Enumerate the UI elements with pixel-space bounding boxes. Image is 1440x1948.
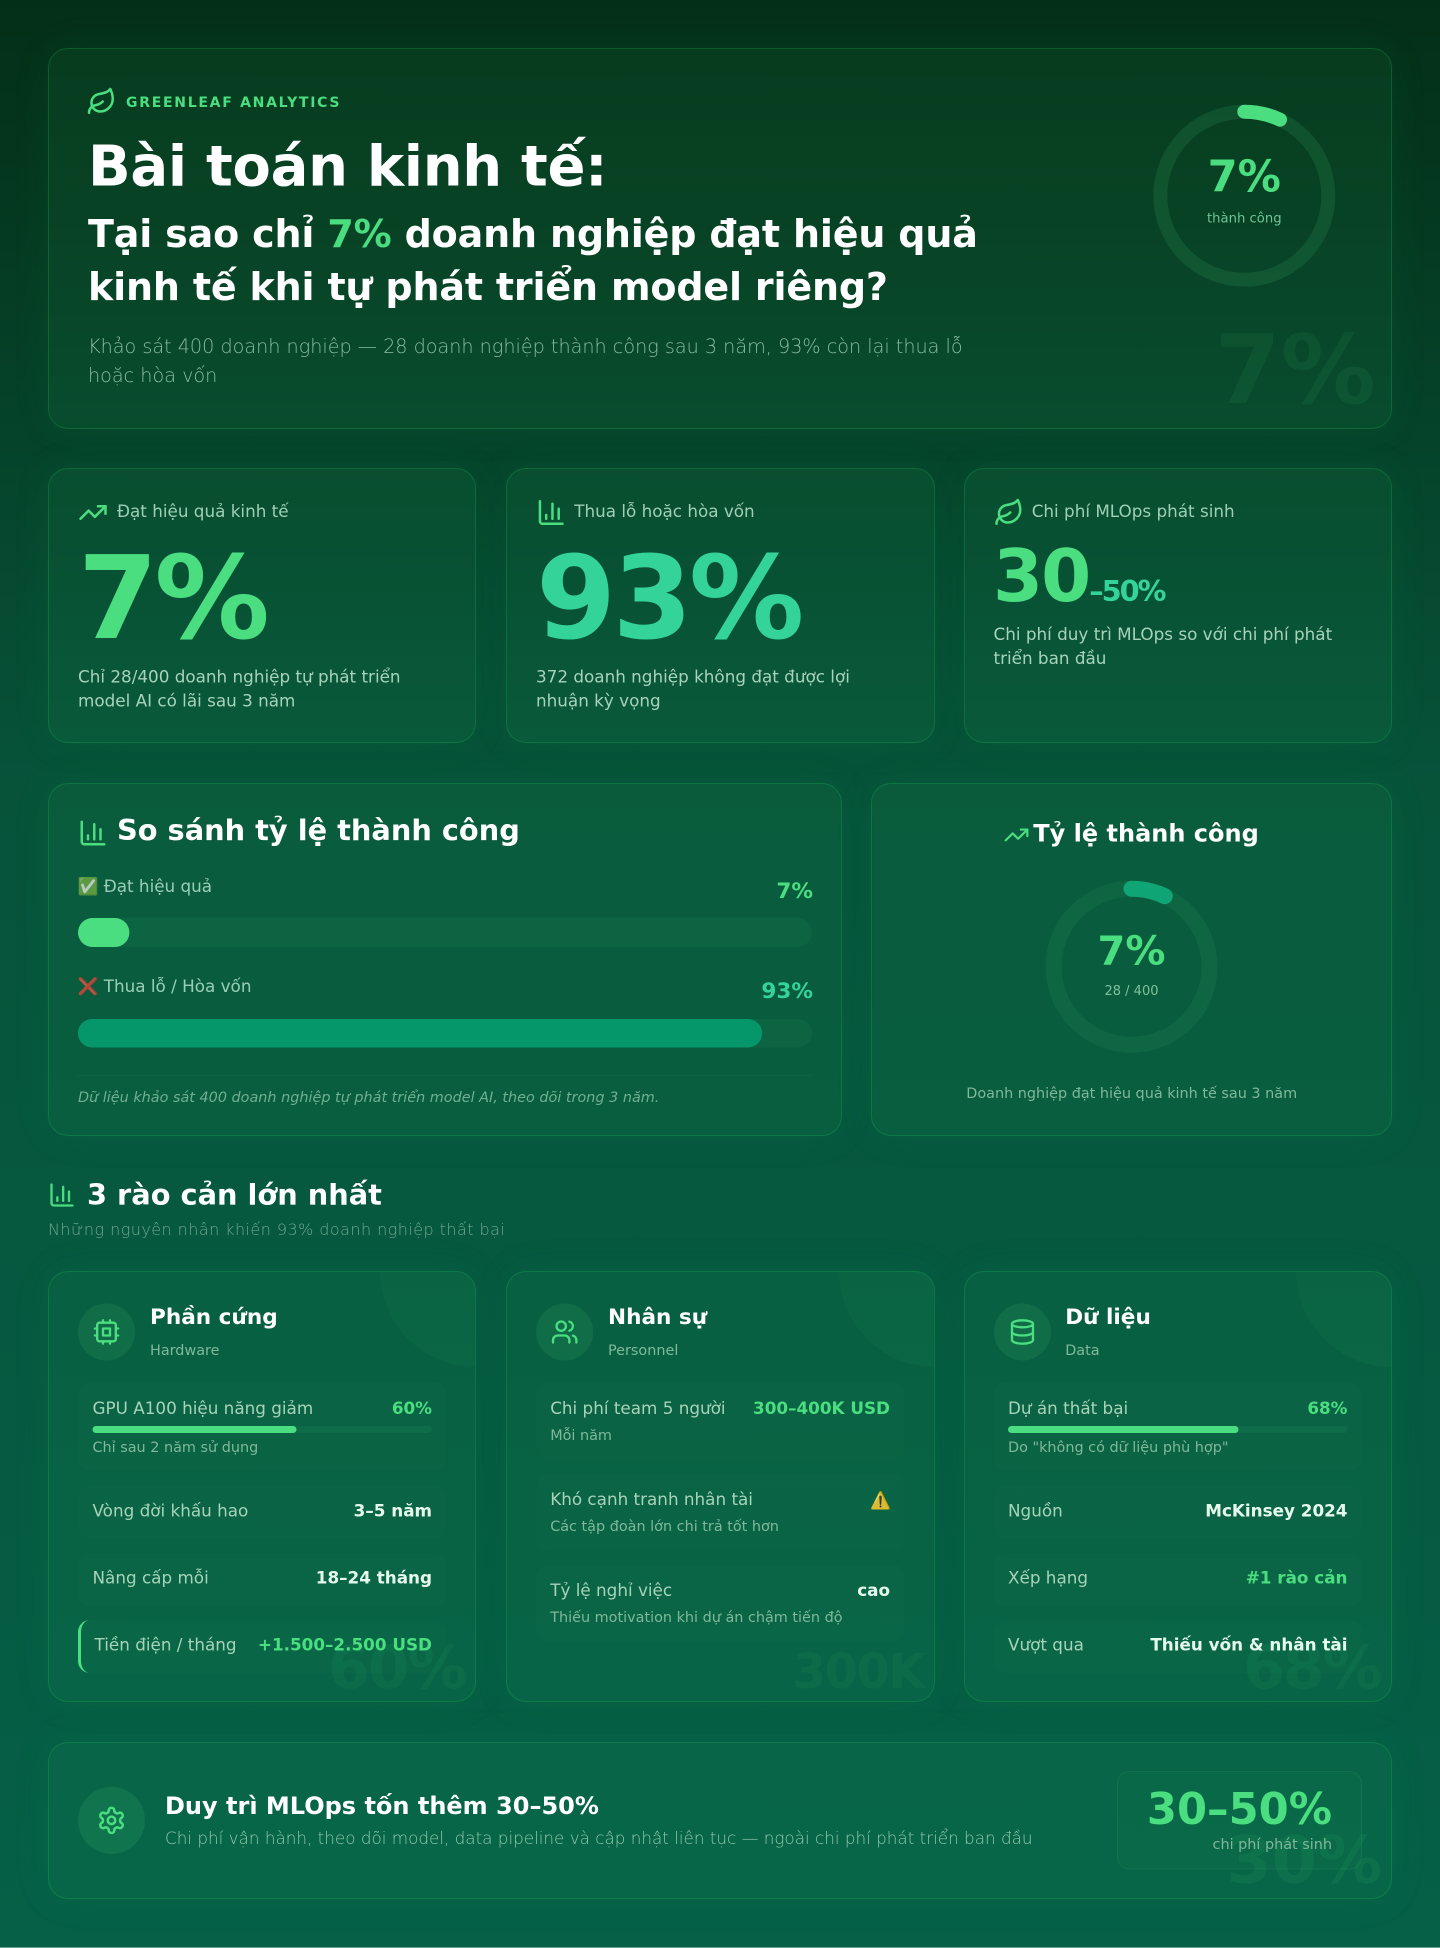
panel: stat 7% [48, 468, 476, 743]
row: electricity: +1.500–2.500 USD [258, 1635, 432, 1655]
panel: stat 93% [506, 468, 934, 743]
subtitle: 7% doanh nghiệp đạt hiệu quả [327, 212, 978, 256]
bar: success [78, 876, 813, 947]
icon: users [536, 1304, 593, 1360]
panel: hero header [48, 48, 1392, 429]
row: lifespan [78, 1486, 446, 1538]
watermark: 300K: 300K [792, 1644, 927, 1700]
subtitle: Tại sao chỉ [88, 212, 327, 256]
row: upgrade: 18–24 tháng [316, 1567, 432, 1587]
bar: success: ✅ Đạt hiệu quả [78, 876, 212, 896]
icon: bar chart [539, 501, 562, 524]
row: overcome: Vượt qua [1008, 1635, 1084, 1655]
card subheading: Hardware [150, 1343, 220, 1359]
bar: failure: 93% [761, 979, 813, 1004]
row: overcome: Thiếu vốn & nhân tài [1150, 1635, 1348, 1655]
row: attrition: Tỷ lệ nghỉ việc [549, 1580, 672, 1600]
stat description: 372 doanh nghiệp không đạt được lợi [536, 667, 849, 687]
row: source: McKinsey 2024 [1205, 1500, 1348, 1520]
section subtitle: Những nguyên nhân khiến 93% doanh nghiệp thất bại [48, 1220, 505, 1239]
card heading: Dữ liệu [1065, 1305, 1151, 1330]
bar: failure: ❌ Thua lỗ / Hòa vốn [78, 976, 251, 997]
row: talent competition: Các tập đoàn lớn chi trả tốt hơn [550, 1518, 778, 1535]
icon: leaf [996, 500, 1020, 524]
row: attrition [536, 1565, 904, 1642]
caption: Doanh nghiệp đạt hiệu quả kinh tế sau 3 năm [966, 1085, 1297, 1102]
watermark: 60%: 60% [328, 1633, 467, 1702]
panel heading: Tỷ lệ thành công [1033, 820, 1259, 848]
panel: MLOps banner [48, 1742, 1392, 1899]
icon: gear [78, 1787, 145, 1854]
row: source: Nguồn [1008, 1500, 1063, 1520]
card subheading: Data [1065, 1343, 1100, 1359]
row: GPU: 60% [392, 1398, 432, 1418]
row: failed projects: Do "không có dữ liệu phù hợp" [1008, 1440, 1228, 1456]
card subheading: Personnel [608, 1343, 678, 1359]
footnote: Dữ liệu khảo sát 400 doanh nghiệp tự phát triển model AI, theo dõi trong 3 năm. [78, 1089, 659, 1106]
stat value: 30–50% [993, 534, 1166, 618]
watermark: 7%: 7% [1214, 316, 1376, 426]
watermark: 68%: 68% [1243, 1633, 1382, 1702]
row: lifespan: Vòng đời khấu hao [92, 1500, 248, 1520]
row: source [994, 1486, 1362, 1538]
row: rank: Xếp hạng [1008, 1567, 1088, 1587]
donut: 7% success: thành công [1207, 211, 1282, 227]
card heading: Nhân sự [608, 1305, 707, 1330]
row: rank [994, 1553, 1362, 1606]
row: rank: #1 rào cản [1246, 1567, 1348, 1587]
callout: 30-50% [1118, 1772, 1362, 1869]
row: attrition: cao [857, 1580, 890, 1600]
row: electricity [78, 1620, 446, 1673]
row: lifespan: 3–5 năm [354, 1500, 432, 1520]
icon: bar chart [52, 1185, 73, 1206]
row: talent competition: ⚠️ [870, 1490, 890, 1510]
stat value: 7% [78, 532, 267, 666]
stat label: Chi phí MLOps phát sinh [1032, 501, 1235, 521]
section title: 3 rào cản lớn nhất [87, 1177, 382, 1211]
donut: 28 of 400: 7% [1098, 928, 1165, 974]
stat description: Chi phí duy trì MLOps so với chi phí phát [994, 624, 1333, 644]
row: GPU: Chỉ sau 2 năm sử dụng [92, 1440, 258, 1456]
panel: data [964, 1271, 1392, 1702]
row: failed projects [994, 1382, 1362, 1470]
stat description: Chỉ 28/400 doanh nghiệp tự phát triển [78, 667, 401, 687]
panel: hardware [48, 1271, 476, 1702]
donut: 7% success [1160, 112, 1328, 280]
description: hoặc hòa vốn [88, 364, 217, 387]
row: GPU [78, 1382, 446, 1470]
row: upgrade: Nâng cấp mỗi [92, 1567, 209, 1587]
banner title: Duy trì MLOps tốn thêm 30–50% [165, 1792, 599, 1820]
panel: success donut [871, 783, 1392, 1136]
row: electricity: Tiền điện / tháng [94, 1635, 237, 1655]
donut: 28 of 400: 28 / 400 [1104, 984, 1158, 999]
bar: success: 7% [776, 879, 813, 904]
row: talent competition: Khó cạnh tranh nhân tài [550, 1489, 752, 1509]
row: talent competition [536, 1474, 904, 1550]
row: team cost [536, 1382, 904, 1459]
row: attrition: Thiếu motivation khi dự án chậm tiến độ [549, 1609, 842, 1626]
row: failed projects: 68% [1307, 1398, 1348, 1418]
watermark: 30%: 30% [1226, 1823, 1382, 1898]
icon: trend up [1006, 830, 1027, 840]
subtitle: kinh tế khi tự phát triển model riêng? [88, 265, 888, 309]
stat label: Đạt hiệu quả kinh tế [117, 501, 289, 521]
row: upgrade [78, 1553, 446, 1606]
card heading: Phần cứng [150, 1305, 278, 1330]
brand label: GREENLEAF ANALYTICS [126, 95, 341, 111]
icon: leaf [89, 89, 113, 113]
stat label: Thua lỗ hoặc hòa vốn [573, 501, 754, 521]
row: team cost: 300–400K USD [753, 1398, 890, 1418]
row: team cost: Chi phí team 5 người [550, 1398, 725, 1418]
bar: failure [78, 976, 813, 1048]
icon: trend up [80, 506, 106, 519]
stat description: nhuận kỳ vọng [536, 691, 660, 711]
callout: 30-50%: chi phí phát sinh [1213, 1837, 1332, 1853]
row: failed projects: Dự án thất bại [1008, 1398, 1128, 1418]
section heading: barriers [48, 1177, 505, 1239]
callout: 30-50%: 30–50% [1147, 1785, 1332, 1835]
icon: bar chart [82, 822, 104, 844]
description: Khảo sát 400 doanh nghiệp — 28 doanh nghiệp thành công sau 3 năm, 93% còn lại thua lỗ [88, 335, 963, 358]
panel: personnel [506, 1271, 934, 1702]
banner description: Chi phí vận hành, theo dõi model, data pipeline và cập nhật liên tục — ngoài chi phí phát triển ban đầu [165, 1828, 1033, 1848]
stat value: 93% [536, 532, 801, 666]
donut: 7% success: 7% [1208, 153, 1281, 203]
stat description: model AI có lãi sau 3 năm [78, 691, 295, 711]
stat description: triển ban đầu [994, 648, 1106, 668]
panel: stat MLOps cost [964, 468, 1392, 743]
icon: database [994, 1304, 1051, 1360]
row: GPU: GPU A100 hiệu năng giảm [92, 1398, 313, 1418]
panel: comparison bars [48, 783, 842, 1136]
title: Bài toán kinh tế: [88, 134, 607, 200]
donut: 28 of 400 [1054, 889, 1210, 1045]
row: team cost: Mỗi năm [550, 1427, 611, 1444]
icon: cpu [78, 1304, 135, 1360]
panel heading: So sánh tỷ lệ thành công [117, 813, 520, 847]
row: overcome [994, 1620, 1362, 1673]
